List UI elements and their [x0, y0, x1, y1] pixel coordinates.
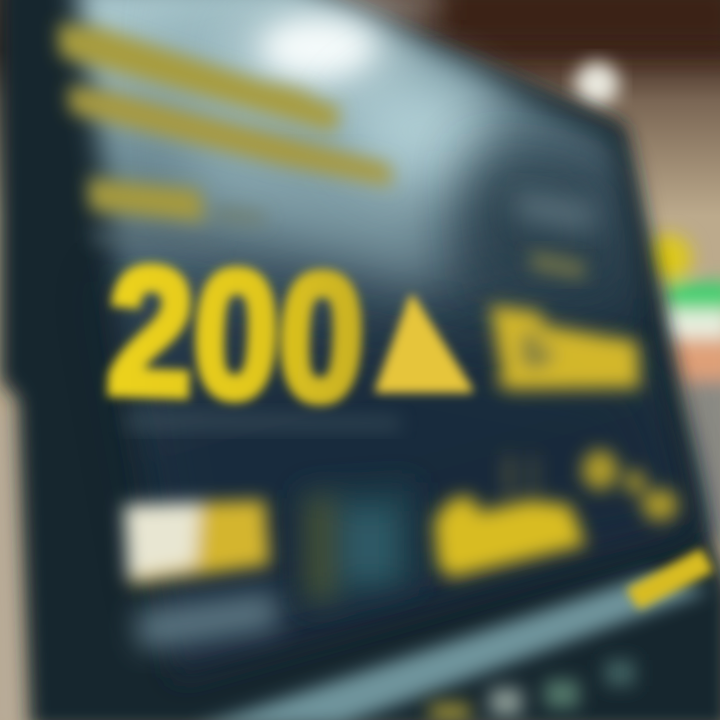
card: dark centre panel — [300, 482, 418, 610]
chart: yellow bars — [434, 455, 586, 578]
big number: 200: 200 — [105, 230, 367, 440]
card: white and yellow panel — [124, 500, 270, 585]
background light: ceiling lamp — [575, 62, 619, 106]
background sign: green and orange stripes — [644, 234, 720, 540]
chart: yellow trend markers — [582, 450, 678, 521]
value block: yellow figures: 12% — [492, 322, 637, 400]
card: grey text block — [135, 592, 278, 650]
heading: yellow title lines — [58, 24, 392, 186]
icon: yellow triangle — [378, 298, 470, 390]
small label above value — [530, 250, 585, 280]
heading: yellow title lines: PRICE UPDATE — [93, 35, 316, 120]
badge: yellow pill — [630, 552, 710, 606]
left wall sliver — [0, 400, 24, 720]
light text on upper right — [515, 190, 595, 232]
caption: faint text under number — [125, 410, 400, 432]
bottom strip of the board — [190, 575, 710, 720]
subheading: yellow label — [88, 178, 265, 252]
bottom colourful tabs — [430, 660, 635, 720]
